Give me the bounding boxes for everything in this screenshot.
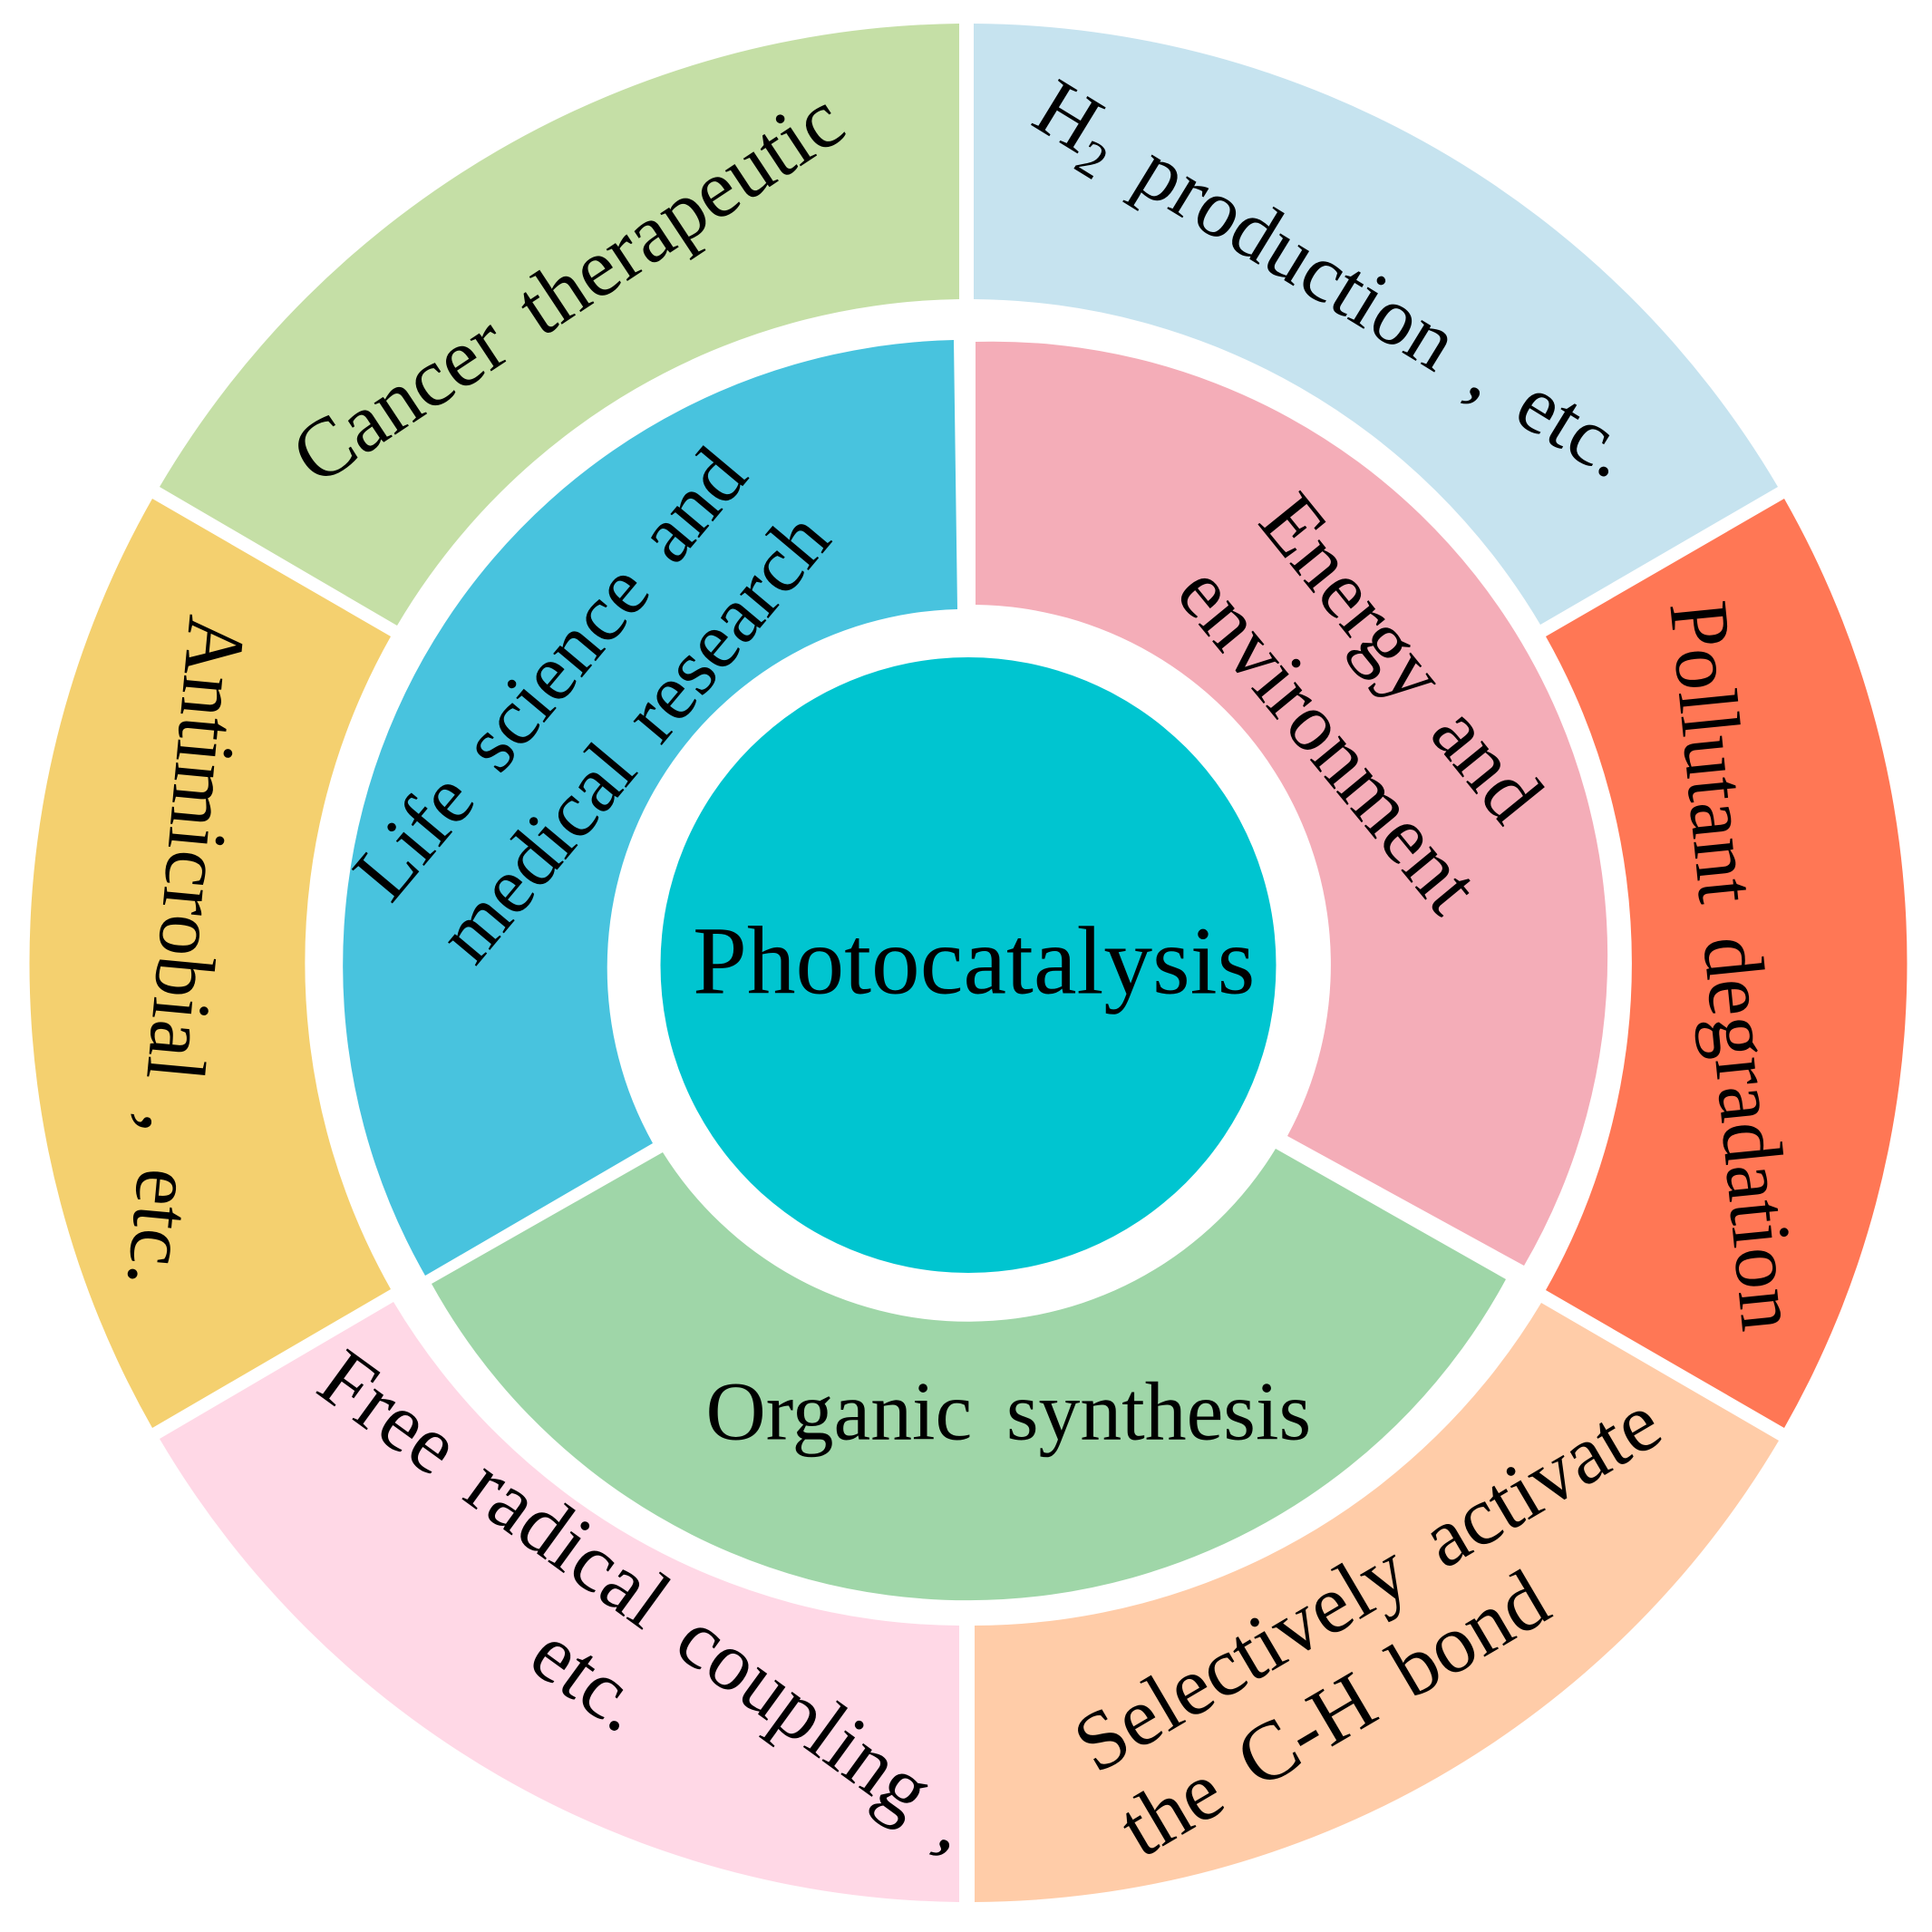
text: free radical coupling etc: etc. (515, 1606, 665, 1750)
text: free radical coupling etc: Free radical coupling , (303, 1331, 995, 1869)
panel: energy and environment sector (976, 342, 1607, 1266)
text: H2 production: 2 (1065, 129, 1118, 191)
text: energy and environment: Energy and (1242, 476, 1561, 840)
panel: pollutant degradation sector (1546, 499, 1907, 1428)
text: H2 production: production , etc. (1092, 106, 1649, 496)
text: selectively activate the C-H bond: Selectively activate (1058, 1374, 1675, 1791)
text: life science and medical research: medical research (421, 495, 847, 979)
panel: selectively activate sector (975, 1303, 1779, 1902)
panel: free radical coupling sector (160, 1302, 995, 1902)
center circle (660, 657, 1277, 1273)
panel: life science sector (336, 340, 957, 1276)
text: pollutant degradation: Pollutant degradation (1652, 597, 1817, 1335)
text: energy and environment: environment (1160, 547, 1499, 930)
text: organic synthesis: Organic synthesis (705, 1364, 1311, 1457)
panel: antimicrobial sector (30, 499, 391, 1428)
panel: organic synthesis sector (432, 1149, 1506, 1600)
panel: H2 production sector (974, 24, 1778, 625)
text: cancer therapeutic: Cancer therapeutic (276, 73, 859, 502)
text: H2 production: H (1019, 61, 1118, 170)
text: selectively activate the C-H bond: the C-H bond (1103, 1551, 1564, 1875)
title: photocatalysis: Photocatalysis (693, 907, 1255, 1015)
text: antimicrobial etc: Antimicrobial , etc. (110, 612, 264, 1291)
panel: cancer therapeutic sector (160, 24, 959, 626)
text: life science and medical research: Life science and (336, 432, 764, 917)
